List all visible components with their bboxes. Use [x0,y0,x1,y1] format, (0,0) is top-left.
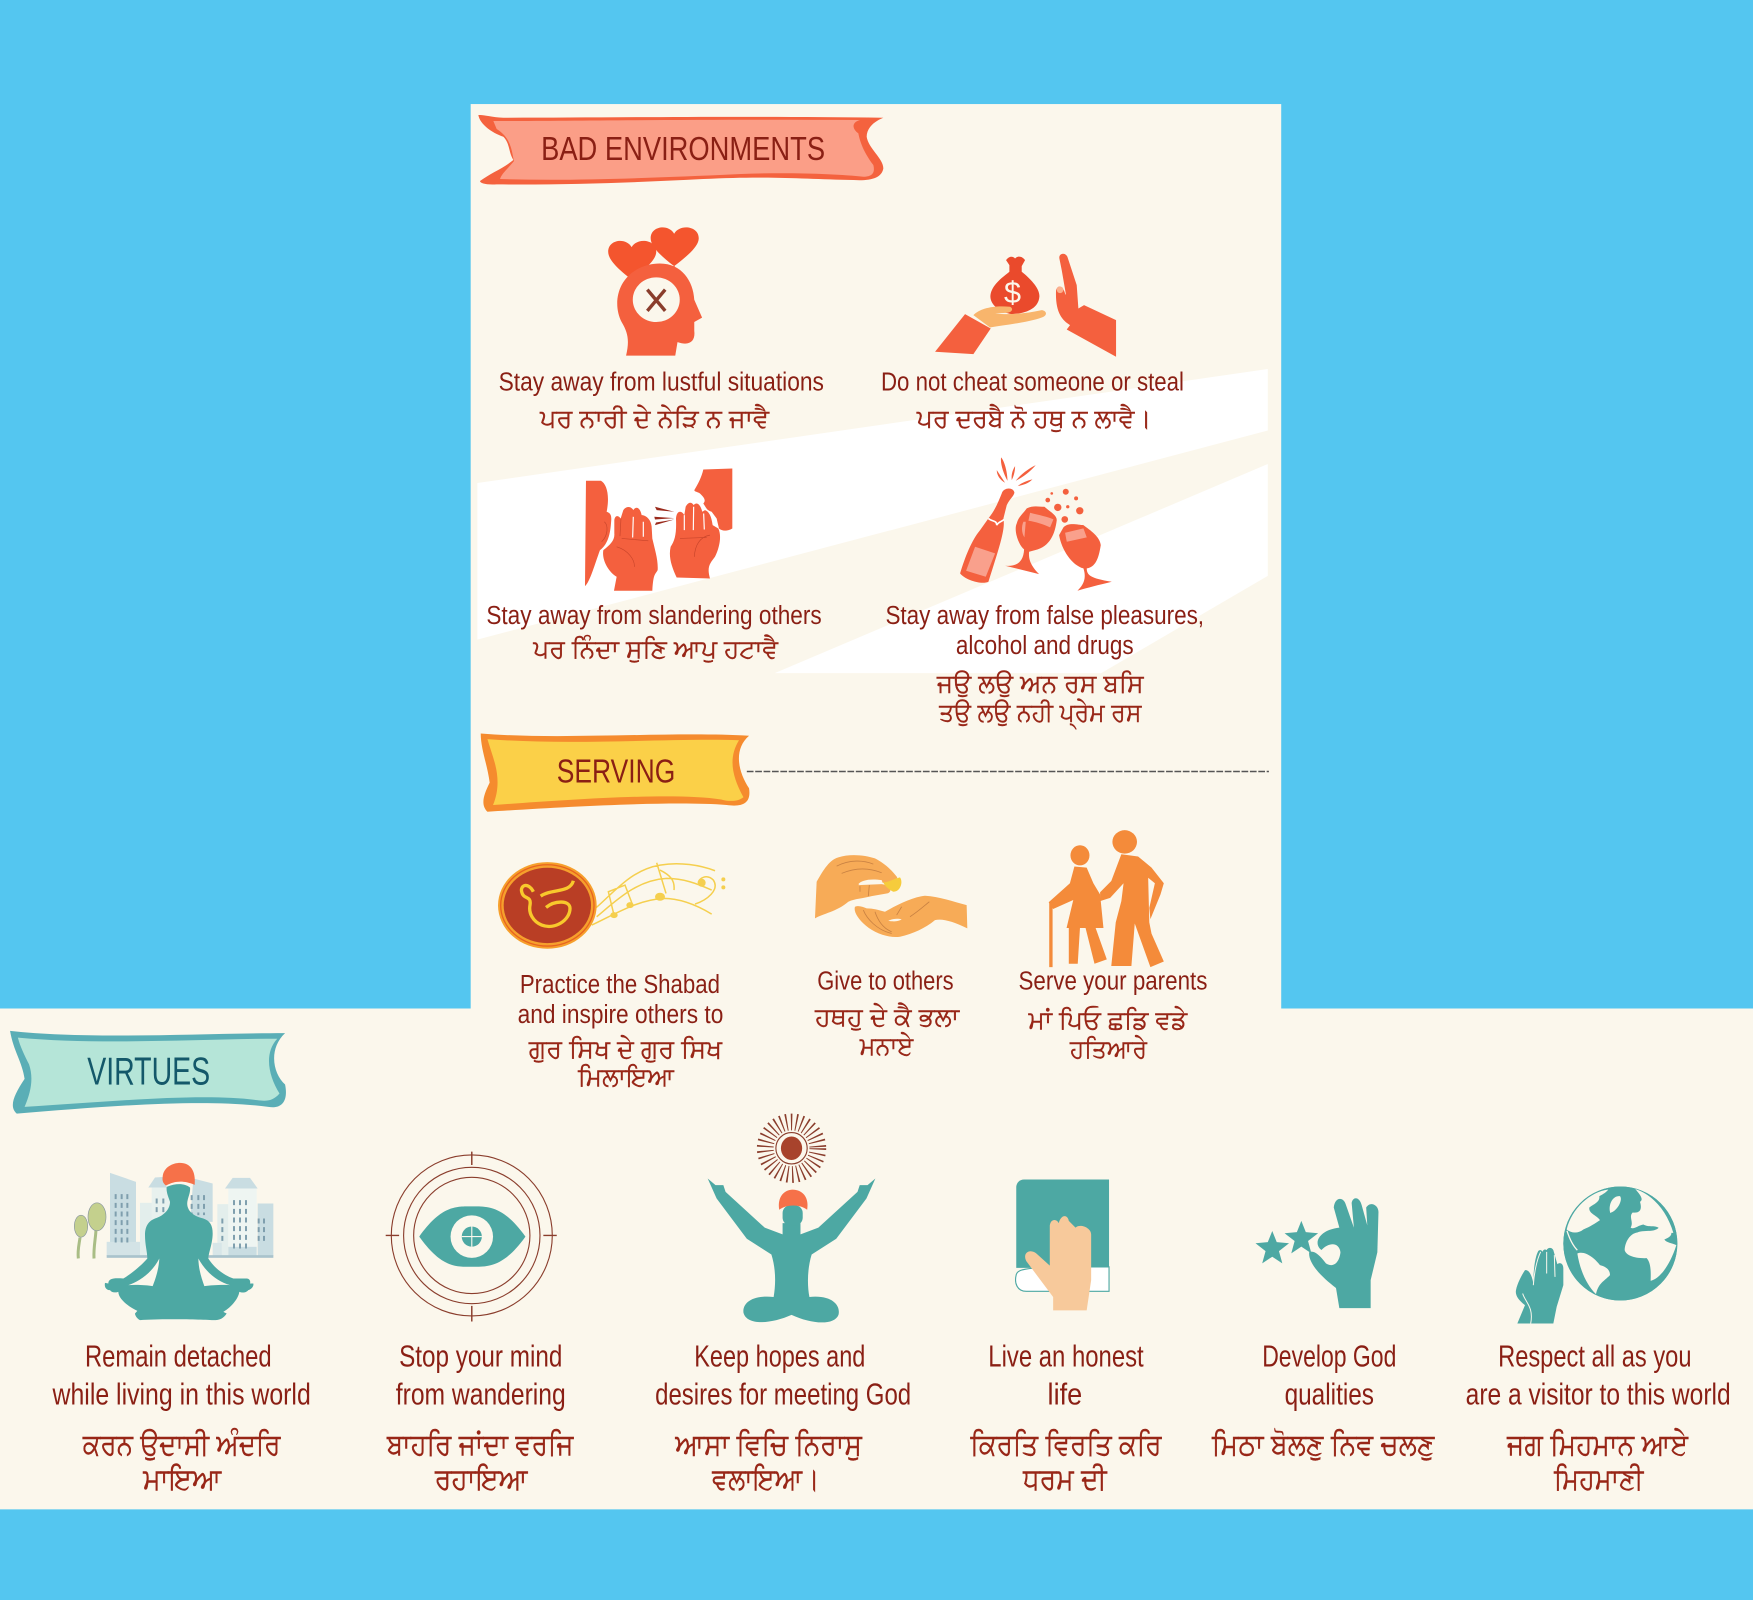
icon: eye in concentric circles [386,1152,557,1322]
text: stop your mind [386,1340,575,1496]
text: develop god: qualities [1285,1378,1374,1411]
text: lustful situations: ਪਰ ਨਾਰੀ ਦੇ ਨੇੜਿ ਨ ਜਾਵੈ [539,403,770,433]
text: lustful situations: Stay away from lustful situations [499,366,824,396]
text: false pleasures: ਤਉ ਲਉ ਨਹੀ ਪ੍ਰੇਮ ਰਸ [938,698,1142,730]
text: remain detached: ਕਰਨ ਉਦਾਸੀ ਅੰਦਰਿ [82,1429,281,1462]
heading: virtues: VIRTUES [87,1051,210,1094]
text: do not cheat: ਪਰ ਦਰਬੈ ਨੋ ਹਥੁ ਨ ਲਾਵੈ। [916,403,1152,433]
text: remain detached [52,1340,311,1496]
heading: serving: SERVING [557,754,675,791]
text: give to others: Give to others [817,965,954,995]
text: live an honest: life [1048,1378,1082,1411]
text: false pleasures: Stay away from false pleasures, [885,600,1204,630]
text: false pleasures [885,600,1204,730]
panel: lower cream band [0,1009,1753,1509]
text: keep hopes: Keep hopes and [694,1340,865,1373]
icon: head with hearts [608,227,702,356]
text: respect all [1466,1340,1731,1496]
text: practice the shabad: ਗੁਰ ਸਿਖ ਦੇ ਗੁਰ ਸਿਖ [528,1035,723,1064]
panel: upper cream panel [471,104,1281,1010]
text: slandering: Stay away from slandering others [486,600,822,630]
text: lustful situations [499,366,824,433]
icon: radiant sun [765,1122,818,1175]
text: stop your mind: ਬਾਹਰਿ ਜਾਂਦਾ ਵਰਜਿ [386,1429,575,1462]
icon: money bag and refusing hand [935,254,1116,357]
heading: bad environments: BAD ENVIRONMENTS [541,131,825,168]
icon: figure with raised arms [708,1178,875,1322]
icon: globe and praying hand [1516,1186,1677,1324]
text: keep hopes: ਆਸਾ ਵਿਚਿ ਨਿਰਾਸੁ [674,1429,863,1462]
icon: hands covering ears and mouth [585,468,732,591]
banner: serving [481,733,749,812]
text: keep hopes: ਵਲਾਇਆ। [711,1463,819,1496]
text: develop god [1211,1340,1436,1462]
banner: virtues [10,1031,286,1114]
text: keep hopes: desires for meeting God [655,1378,911,1411]
text: respect all: ਮਿਹਮਾਣੀ [1553,1463,1644,1496]
text: practice the shabad [518,969,723,1092]
text: live an honest: Live an honest [988,1340,1144,1373]
icon: giving hands [815,855,967,937]
icon: bottle and wine glasses [960,457,1112,591]
text: do not cheat [881,366,1184,433]
text: false pleasures: ਜਉ ਲਉ ਅਨ ਰਸ ਬਸਿ [936,669,1145,698]
text: respect all: Respect all as you [1498,1340,1692,1373]
text: give to others [814,965,961,1060]
icon: stars and ok hand [1255,1198,1378,1308]
text: remain detached: while living in this world [52,1378,311,1411]
text: slandering: ਪਰ ਨਿੰਦਾ ਸੁਣਿ ਆਪੁ ਹਟਾਵੈ [532,633,779,663]
icon: elderly couple [1049,830,1164,967]
icon: hand on book [1016,1180,1109,1310]
text: give to others: ਹਥਹੁ ਦੇ ਕੈ ਭਲਾ [814,1001,961,1031]
text: stop your mind: Stop your mind [399,1340,562,1373]
text: keep hopes [655,1340,911,1496]
icon: ek onkar and music [498,862,725,949]
text: develop god: Develop God [1262,1340,1396,1373]
text: live an honest: ਕਿਰਤਿ ਵਿਰਤਿ ਕਰਿ [970,1429,1162,1462]
text: false pleasures: alcohol and drugs [956,630,1134,660]
text: serve your parents: Serve your parents [1018,965,1207,995]
text: remain detached: Remain detached [85,1340,272,1373]
icon: money bag and refusing hand: $ [1004,276,1021,310]
text: stop your mind: from wandering [396,1378,566,1411]
text: give to others: ਮਨਾਏ [859,1031,914,1060]
text: remain detached: ਮਾਇਆ [142,1463,222,1496]
text: practice the shabad: ਮਿਲਾਇਆ [577,1063,675,1092]
text: slandering [486,600,822,663]
banner: bad environments [478,115,883,185]
text: stop your mind: ਰਹਾਇਆ [434,1463,529,1496]
text: serve your parents: ਮਾਂ ਪਿਓ ਛਡਿ ਵਡੇ [1028,1005,1189,1035]
text: serve your parents [1018,965,1207,1064]
text: practice the shabad: Practice the Shabad [520,969,720,999]
text: serve your parents: ਹਤਿਆਰੇ [1069,1035,1148,1064]
text: practice the shabad: and inspire others to [518,999,723,1029]
text: develop god: ਮਿਠਾ ਬੋਲਣੁ ਨਿਵ ਚਲਣੁ [1211,1429,1436,1462]
icon: meditating figure with city [74,1163,273,1320]
text: respect all: ਜਗ ਮਿਹਮਾਨ ਆਏ [1506,1429,1689,1462]
text: live an honest: ਧਰਮ ਦੀ [1022,1463,1108,1496]
text: do not cheat: Do not cheat someone or steal [881,366,1184,396]
text: live an honest [970,1340,1162,1496]
